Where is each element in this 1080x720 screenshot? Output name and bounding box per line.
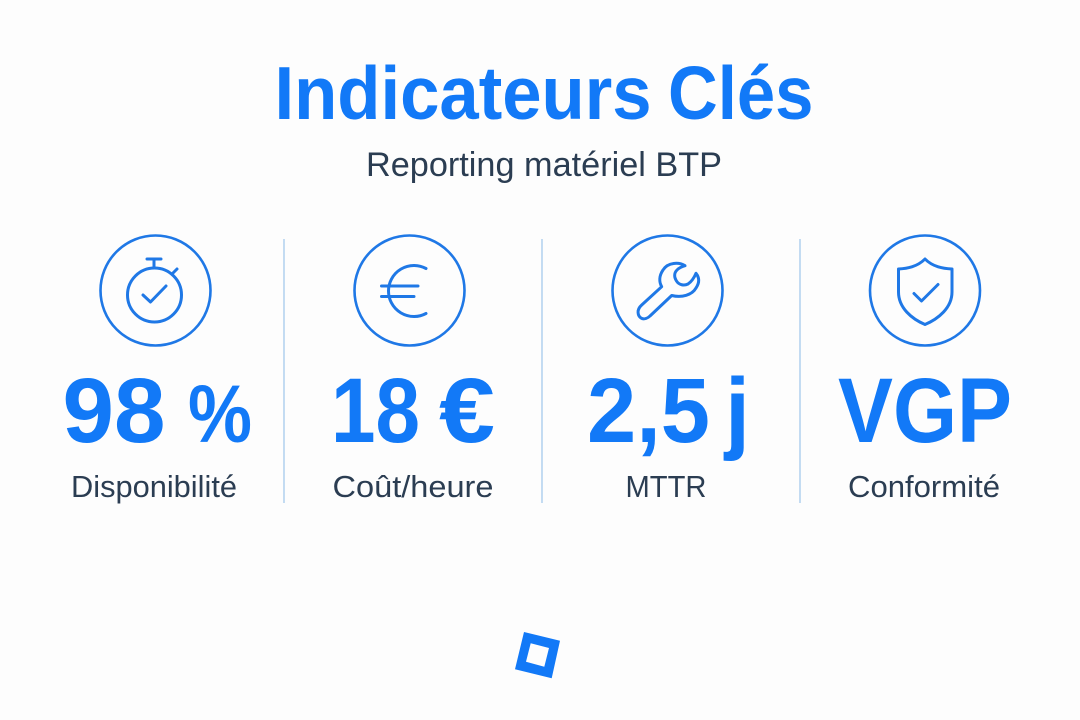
- value: [331, 360, 495, 462]
- title: Clés: [668, 51, 814, 135]
- icon: wrench: [612, 236, 722, 346]
- label: Disponibilité: [71, 470, 237, 504]
- icon: euro: [354, 236, 464, 346]
- label: Coût/heure: [332, 470, 494, 504]
- value: %: [188, 369, 252, 460]
- value: VGP: [838, 360, 1012, 462]
- icon: shield: [870, 236, 980, 346]
- panel: coût/heure: [331, 236, 495, 504]
- value: 98: [62, 360, 166, 462]
- panel: disponibilité: [62, 236, 252, 504]
- value: €: [439, 360, 495, 462]
- panel: conformité: [838, 236, 1012, 504]
- icon: rotated square: [515, 632, 560, 678]
- label: Conformité: [848, 470, 1000, 504]
- value: j: [723, 360, 750, 462]
- value: [62, 360, 252, 462]
- label: MTTR: [626, 470, 706, 504]
- value: 18: [331, 360, 420, 462]
- title: Indicateurs: [274, 51, 652, 135]
- panel: MTTR: [587, 236, 750, 504]
- value: 2,5: [587, 360, 710, 462]
- subtitle: Reporting matériel BTP: [366, 146, 722, 184]
- icon: stopwatch: [100, 236, 210, 346]
